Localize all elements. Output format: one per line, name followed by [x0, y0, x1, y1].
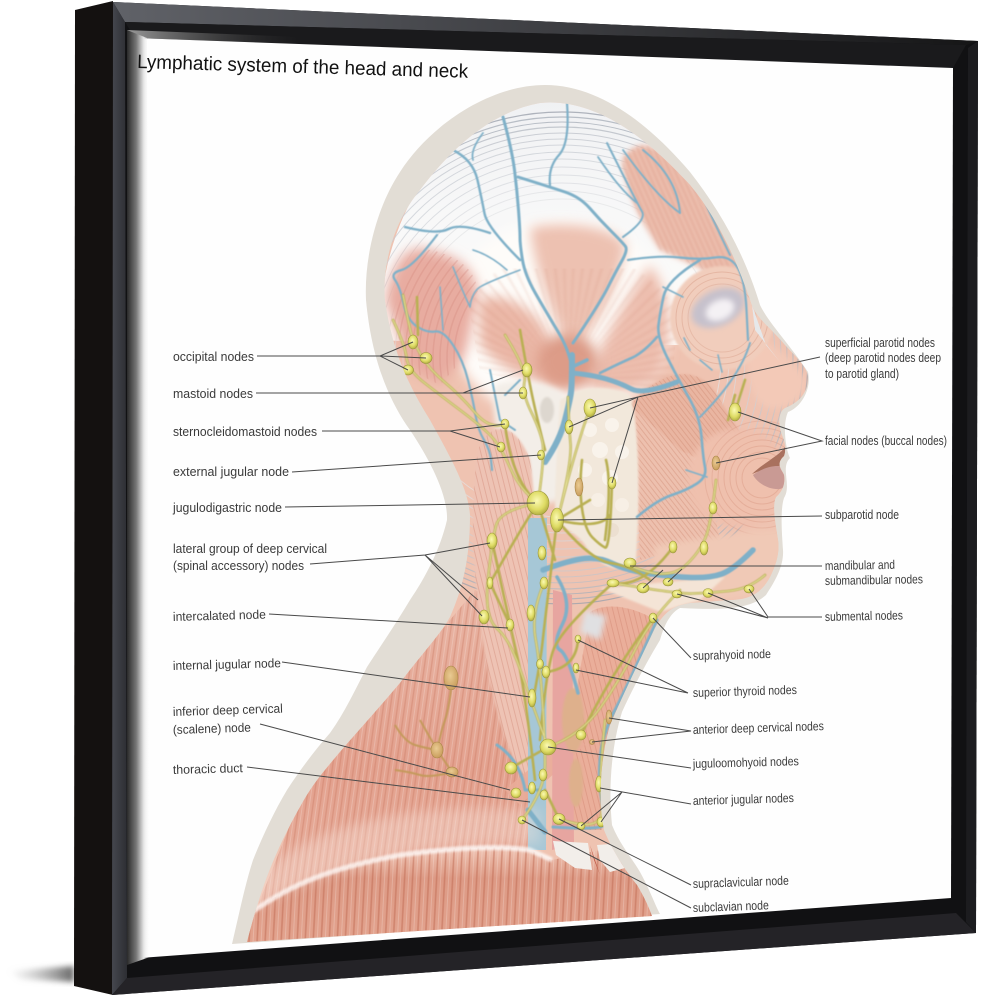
label: suprahyoid node — [653, 618, 771, 663]
mastoid and upper neck pale area — [493, 381, 565, 503]
label: mastoid nodes: mastoid nodes — [173, 387, 253, 401]
label: anterior jugular nodes: anterior jugular nodes — [693, 791, 794, 808]
eye and orbit — [670, 266, 780, 370]
label: superficial parotid nodes: superficial parotid nodes — [825, 336, 935, 350]
frame left side face — [74, 1, 113, 995]
label: internal jugular node: internal jugular node — [173, 656, 281, 673]
label: mastoid nodes — [173, 370, 523, 401]
label: inferior deep cervical (scalene) node — [173, 702, 510, 790]
omohyoid band — [506, 744, 585, 804]
label: facial nodes (buccal nodes) — [716, 412, 947, 463]
label: superficial parotid nodes — [569, 336, 941, 483]
blue lymph and venous vessels — [393, 103, 753, 832]
internal jugular vein — [528, 518, 547, 850]
frame rebate top — [125, 22, 966, 68]
canvas inner shadow — [127, 30, 150, 965]
parotid gland — [555, 388, 638, 568]
label: thoracic duct — [173, 761, 530, 802]
label: supraclavicular node — [559, 819, 789, 891]
label: submental nodes: submental nodes — [825, 608, 903, 624]
label: external jugular node: external jugular node — [173, 465, 289, 479]
frame rebate highlight — [127, 30, 300, 44]
label: occipital nodes — [173, 342, 426, 370]
label: superficial parotid nodes: to parotid gland) — [825, 367, 899, 381]
label: intercalated node: intercalated node — [173, 608, 266, 624]
label: anterior deep cervical nodes — [592, 718, 824, 742]
tan nodes — [431, 456, 720, 777]
chin and jaw skin — [600, 530, 785, 612]
label: internal jugular node — [173, 656, 530, 697]
label: mandibular and submandibular nodes — [630, 558, 923, 588]
label: thoracic duct: thoracic duct — [173, 761, 244, 777]
label: submental nodes — [677, 589, 903, 624]
label: juguloomohyoid nodes — [548, 747, 799, 771]
label: superior thyroid nodes — [576, 640, 797, 700]
label: sternocleidomastoid nodes — [173, 424, 505, 447]
lips — [752, 447, 786, 489]
masseter and cheek muscles — [630, 374, 745, 560]
frame bottom edge — [112, 913, 976, 995]
frame left band — [112, 2, 127, 995]
lower chest and shoulder muscles — [240, 808, 660, 950]
label: jugulodigastric node: jugulodigastric node — [172, 501, 282, 515]
frame right band — [966, 41, 978, 933]
label: mandibular and submandibular nodes: submandibular nodes — [825, 572, 923, 588]
label: inferior deep cervical (scalene) node: (scalene) node — [173, 721, 251, 737]
label: mandibular and submandibular nodes: mandibular and — [825, 558, 895, 573]
label: supraclavicular node: supraclavicular node — [693, 874, 789, 891]
yellow lymphatic vessels — [393, 295, 765, 824]
base skin tone — [256, 102, 808, 940]
skull aponeurosis with concentric stripes — [384, 102, 808, 604]
label: lateral group of deep cervical nodes — [173, 542, 490, 616]
frame top band — [113, 2, 978, 45]
label: superficial parotid nodes: (deep parotid nodes deep — [825, 351, 941, 365]
label: lateral group of deep cervical nodes: (spinal accessory) nodes — [173, 559, 304, 573]
nose and face skin — [750, 343, 808, 410]
beige silhouette — [232, 85, 809, 944]
label: lateral group of deep cervical nodes: lateral group of deep cervical — [173, 542, 327, 556]
trapezius muscle — [240, 590, 540, 950]
label: subclavian node — [522, 820, 769, 915]
mouth muscle orbicularis — [687, 420, 786, 532]
label: subparotid node — [558, 508, 899, 522]
label: juguloomohyoid nodes: juguloomohyoid nodes — [692, 754, 799, 771]
label: facial nodes (buccal nodes): facial nodes (buccal nodes) — [825, 434, 947, 448]
label: subclavian node: subclavian node — [693, 898, 769, 915]
label: subparotid node: subparotid node — [825, 508, 899, 522]
frame drop shadow — [8, 966, 74, 982]
label: inferior deep cervical (scalene) node: inferior deep cervical — [173, 702, 283, 719]
label: sternocleidomastoid nodes: sternocleidomastoid nodes — [173, 425, 317, 439]
white canvas — [135, 38, 953, 958]
label: external jugular node — [173, 455, 541, 479]
forehead frontalis muscle — [619, 142, 736, 271]
label: intercalated node — [173, 608, 508, 628]
label: superior thyroid nodes: superior thyroid nodes — [693, 683, 797, 700]
carotid artery — [552, 590, 574, 850]
strap muscles of anterior neck — [570, 607, 655, 830]
temporalis fan muscles — [470, 218, 675, 396]
label: anterior jugular nodes — [581, 788, 794, 826]
illustration: head and neck anatomy — [230, 85, 830, 950]
label: jugulodigastric node — [172, 501, 535, 515]
clavicular tendons — [553, 841, 625, 875]
occipital muscle — [384, 241, 485, 384]
sternocleidomastoid muscle — [473, 429, 534, 780]
title: Lymphatic system of the head and neck — [137, 51, 469, 83]
label: anterior deep cervical nodes: anterior deep cervical nodes — [693, 719, 824, 737]
label: suprahyoid node: suprahyoid node — [693, 647, 771, 663]
thyroid gland — [562, 688, 584, 752]
lymph nodes — [402, 335, 754, 830]
label: occipital nodes: occipital nodes — [173, 350, 254, 364]
